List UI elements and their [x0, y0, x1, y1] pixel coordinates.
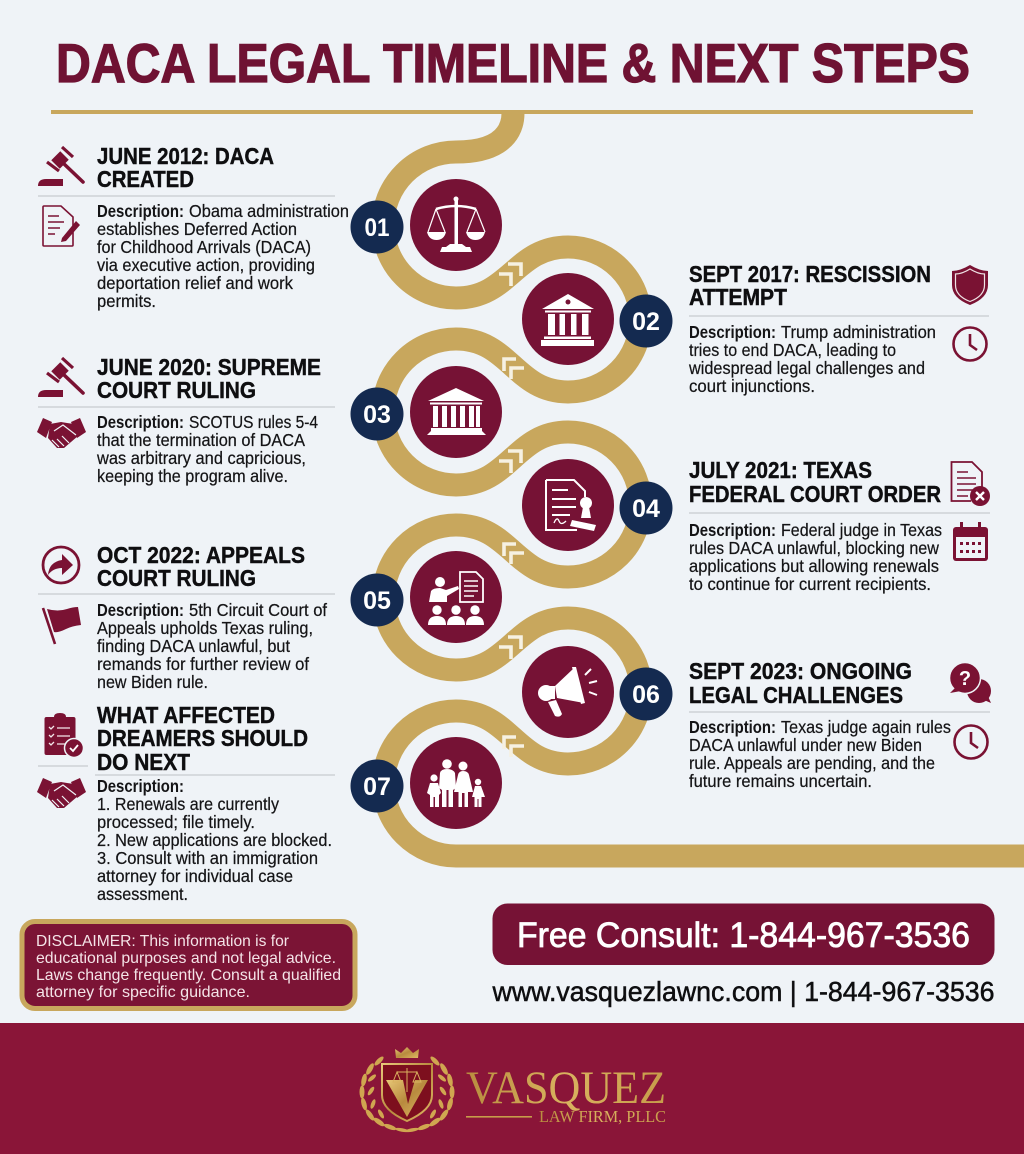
description text: Trump administration [781, 322, 936, 342]
heading [97, 143, 274, 192]
description text: tries to end DACA, leading to [689, 340, 896, 360]
description text [97, 776, 332, 904]
icon: gavel [38, 358, 83, 397]
description text [688, 322, 936, 396]
number badge 03: 03 [363, 401, 391, 429]
step 02 icon: courthouse [522, 273, 614, 365]
icon: circled arrow [43, 547, 79, 583]
heading [97, 354, 321, 403]
consult button: Free Consult: 1-844-967-3536 [517, 916, 970, 955]
icon: question chat bubbles: ? [959, 668, 971, 690]
serpentine timeline path [383, 113, 1024, 856]
description text: rules DACA unlawful, blocking new [689, 538, 939, 558]
number badge 07 [350, 760, 404, 812]
heading: WHAT AFFECTED [97, 702, 275, 728]
heading [97, 702, 308, 775]
heading: DREAMERS SHOULD [97, 725, 308, 751]
description text: widespread legal challenges and [688, 358, 925, 378]
description text: DACA unlawful under new Biden [689, 735, 922, 755]
number badge 04 [620, 482, 672, 534]
description text: via executive action, providing [97, 255, 315, 275]
step 04 icon: document and stamp [522, 459, 614, 551]
icon: handshake [37, 778, 86, 808]
description text: 5th Circuit Court of [189, 600, 327, 620]
description text: that the termination of DACA [97, 430, 305, 450]
description text: permits. [97, 291, 156, 311]
description text [97, 201, 349, 311]
logo wordmark: VASQUEZ [466, 1062, 666, 1114]
description text: keeping the program alive. [97, 466, 288, 486]
heading: COURT RULING [97, 377, 256, 403]
description text: deportation relief and work [97, 273, 293, 293]
description text: Description: [689, 717, 776, 737]
heading: ATTEMPT [689, 284, 788, 310]
icon: handshake [37, 418, 86, 448]
number badge 06 [620, 668, 672, 720]
logo: Vasquez Law Firm crest [360, 1047, 454, 1133]
description text: Texas judge again rules [781, 717, 951, 737]
description text: finding DACA unlawful, but [97, 636, 290, 656]
website and phone line: www.vasquezlawnc.com | 1-844-967-3536 [492, 976, 994, 1007]
step 01 icon: scales of justice [410, 179, 502, 271]
description text: Description: [97, 201, 184, 221]
description text: Description: [97, 412, 184, 432]
number badge 04: 04 [632, 495, 660, 523]
description text: for Childhood Arrivals (DACA) [97, 237, 311, 257]
number badge 05: 05 [363, 587, 391, 615]
number badge 02 [620, 294, 672, 348]
disclaimer box: Laws change frequently. Consult a qualified [36, 967, 341, 984]
description text [97, 600, 327, 692]
description text: Appeals upholds Texas ruling, [97, 618, 313, 638]
description text: new Biden rule. [97, 672, 208, 692]
heading [689, 261, 931, 310]
description text: 2. New applications are blocked. [97, 830, 332, 850]
description text: processed; file timely. [97, 812, 255, 832]
number badge 01 [350, 200, 404, 254]
icon: calendar [953, 522, 988, 561]
description text: Description: [689, 520, 776, 540]
description text: future remains uncertain. [689, 771, 872, 791]
icon: document with x [952, 462, 990, 506]
heading [97, 542, 305, 591]
heading [689, 658, 912, 708]
description text: establishes Deferred Action [97, 219, 297, 239]
footer band [0, 1023, 1024, 1154]
description text: Description: [689, 322, 776, 342]
icon: checklist clipboard [44, 713, 84, 758]
heading: DO NEXT [97, 749, 191, 775]
heading: SEPT 2023: ONGOING [689, 658, 912, 684]
icon: flag [43, 607, 81, 644]
heading: JUNE 2012: DACA [97, 143, 274, 169]
icon: shield [952, 265, 988, 305]
description text: 1. Renewals are currently [97, 794, 279, 814]
step 05 icon: presenter and audience [410, 551, 502, 643]
heading: OCT 2022: APPEALS [97, 542, 305, 568]
description text: Federal judge in Texas [781, 520, 942, 540]
description text: attorney for individual case [97, 866, 293, 886]
description text: Description: [97, 600, 184, 620]
description text [96, 412, 318, 486]
heading: JUNE 2020: SUPREME [97, 354, 321, 380]
icon: clock [954, 328, 986, 360]
disclaimer box [22, 922, 355, 1008]
number badge 02: 02 [632, 308, 660, 336]
panel: Sept 2017 rescission attempt [688, 261, 989, 396]
number badge 07: 07 [363, 773, 391, 801]
description text: 3. Consult with an immigration [97, 848, 318, 868]
description text: SCOTUS rules 5-4 [189, 412, 318, 432]
panel: what affected Dreamers should do next [37, 702, 335, 904]
disclaimer box: educational purposes and not legal advice. [36, 950, 336, 967]
description text: court injunctions. [689, 376, 815, 396]
panel: Oct 2022 appeals court ruling [38, 542, 335, 692]
chevrons: direction arrows on path [499, 264, 524, 757]
description text: applications but allowing renewals [689, 556, 939, 576]
number badge 06: 06 [632, 681, 660, 709]
consult button [492, 904, 994, 965]
description text: rule. Appeals are pending, and the [689, 753, 935, 773]
heading: COURT RULING [97, 565, 256, 591]
panel: July 2021 Texas federal court order [689, 457, 990, 594]
step 03 icon: supreme court [410, 366, 502, 458]
description text [689, 520, 942, 594]
description text: Description: [97, 776, 184, 796]
description text: was arbitrary and capricious, [96, 448, 306, 468]
description text [689, 717, 951, 791]
icon: document with pen [43, 206, 80, 246]
description text: remands for further review of [97, 654, 309, 674]
heading: FEDERAL COURT ORDER [689, 481, 941, 507]
heading: SEPT 2017: RESCISSION [689, 261, 931, 287]
number badge 01: 01 [364, 214, 390, 242]
number badge 03 [350, 388, 404, 440]
description text: assessment. [97, 884, 188, 904]
panel: June 2012 DACA created [38, 143, 349, 311]
disclaimer box: DISCLAIMER: This information is for [36, 933, 290, 950]
description text: to continue for current recipients. [689, 574, 931, 594]
gold title rule [51, 110, 973, 114]
step 06 icon: megaphone [522, 646, 614, 738]
logo wordmark: LAW FIRM, PLLC [539, 1107, 666, 1126]
heading: JULY 2021: TEXAS [689, 457, 872, 483]
icon: clock [954, 726, 988, 758]
panel: Sept 2023 ongoing legal challenges [689, 658, 991, 791]
icon: gavel [38, 147, 83, 186]
heading: CREATED [97, 166, 194, 192]
description text: Obama administration [189, 201, 349, 221]
disclaimer box: attorney for specific guidance. [36, 984, 250, 1001]
icon: question chat bubbles [950, 662, 991, 703]
heading: LEGAL CHALLENGES [689, 682, 903, 708]
panel: June 2020 Supreme Court ruling [37, 354, 335, 486]
step 07 icon: family [410, 737, 502, 829]
heading [689, 457, 941, 507]
number badge 05 [350, 574, 404, 626]
